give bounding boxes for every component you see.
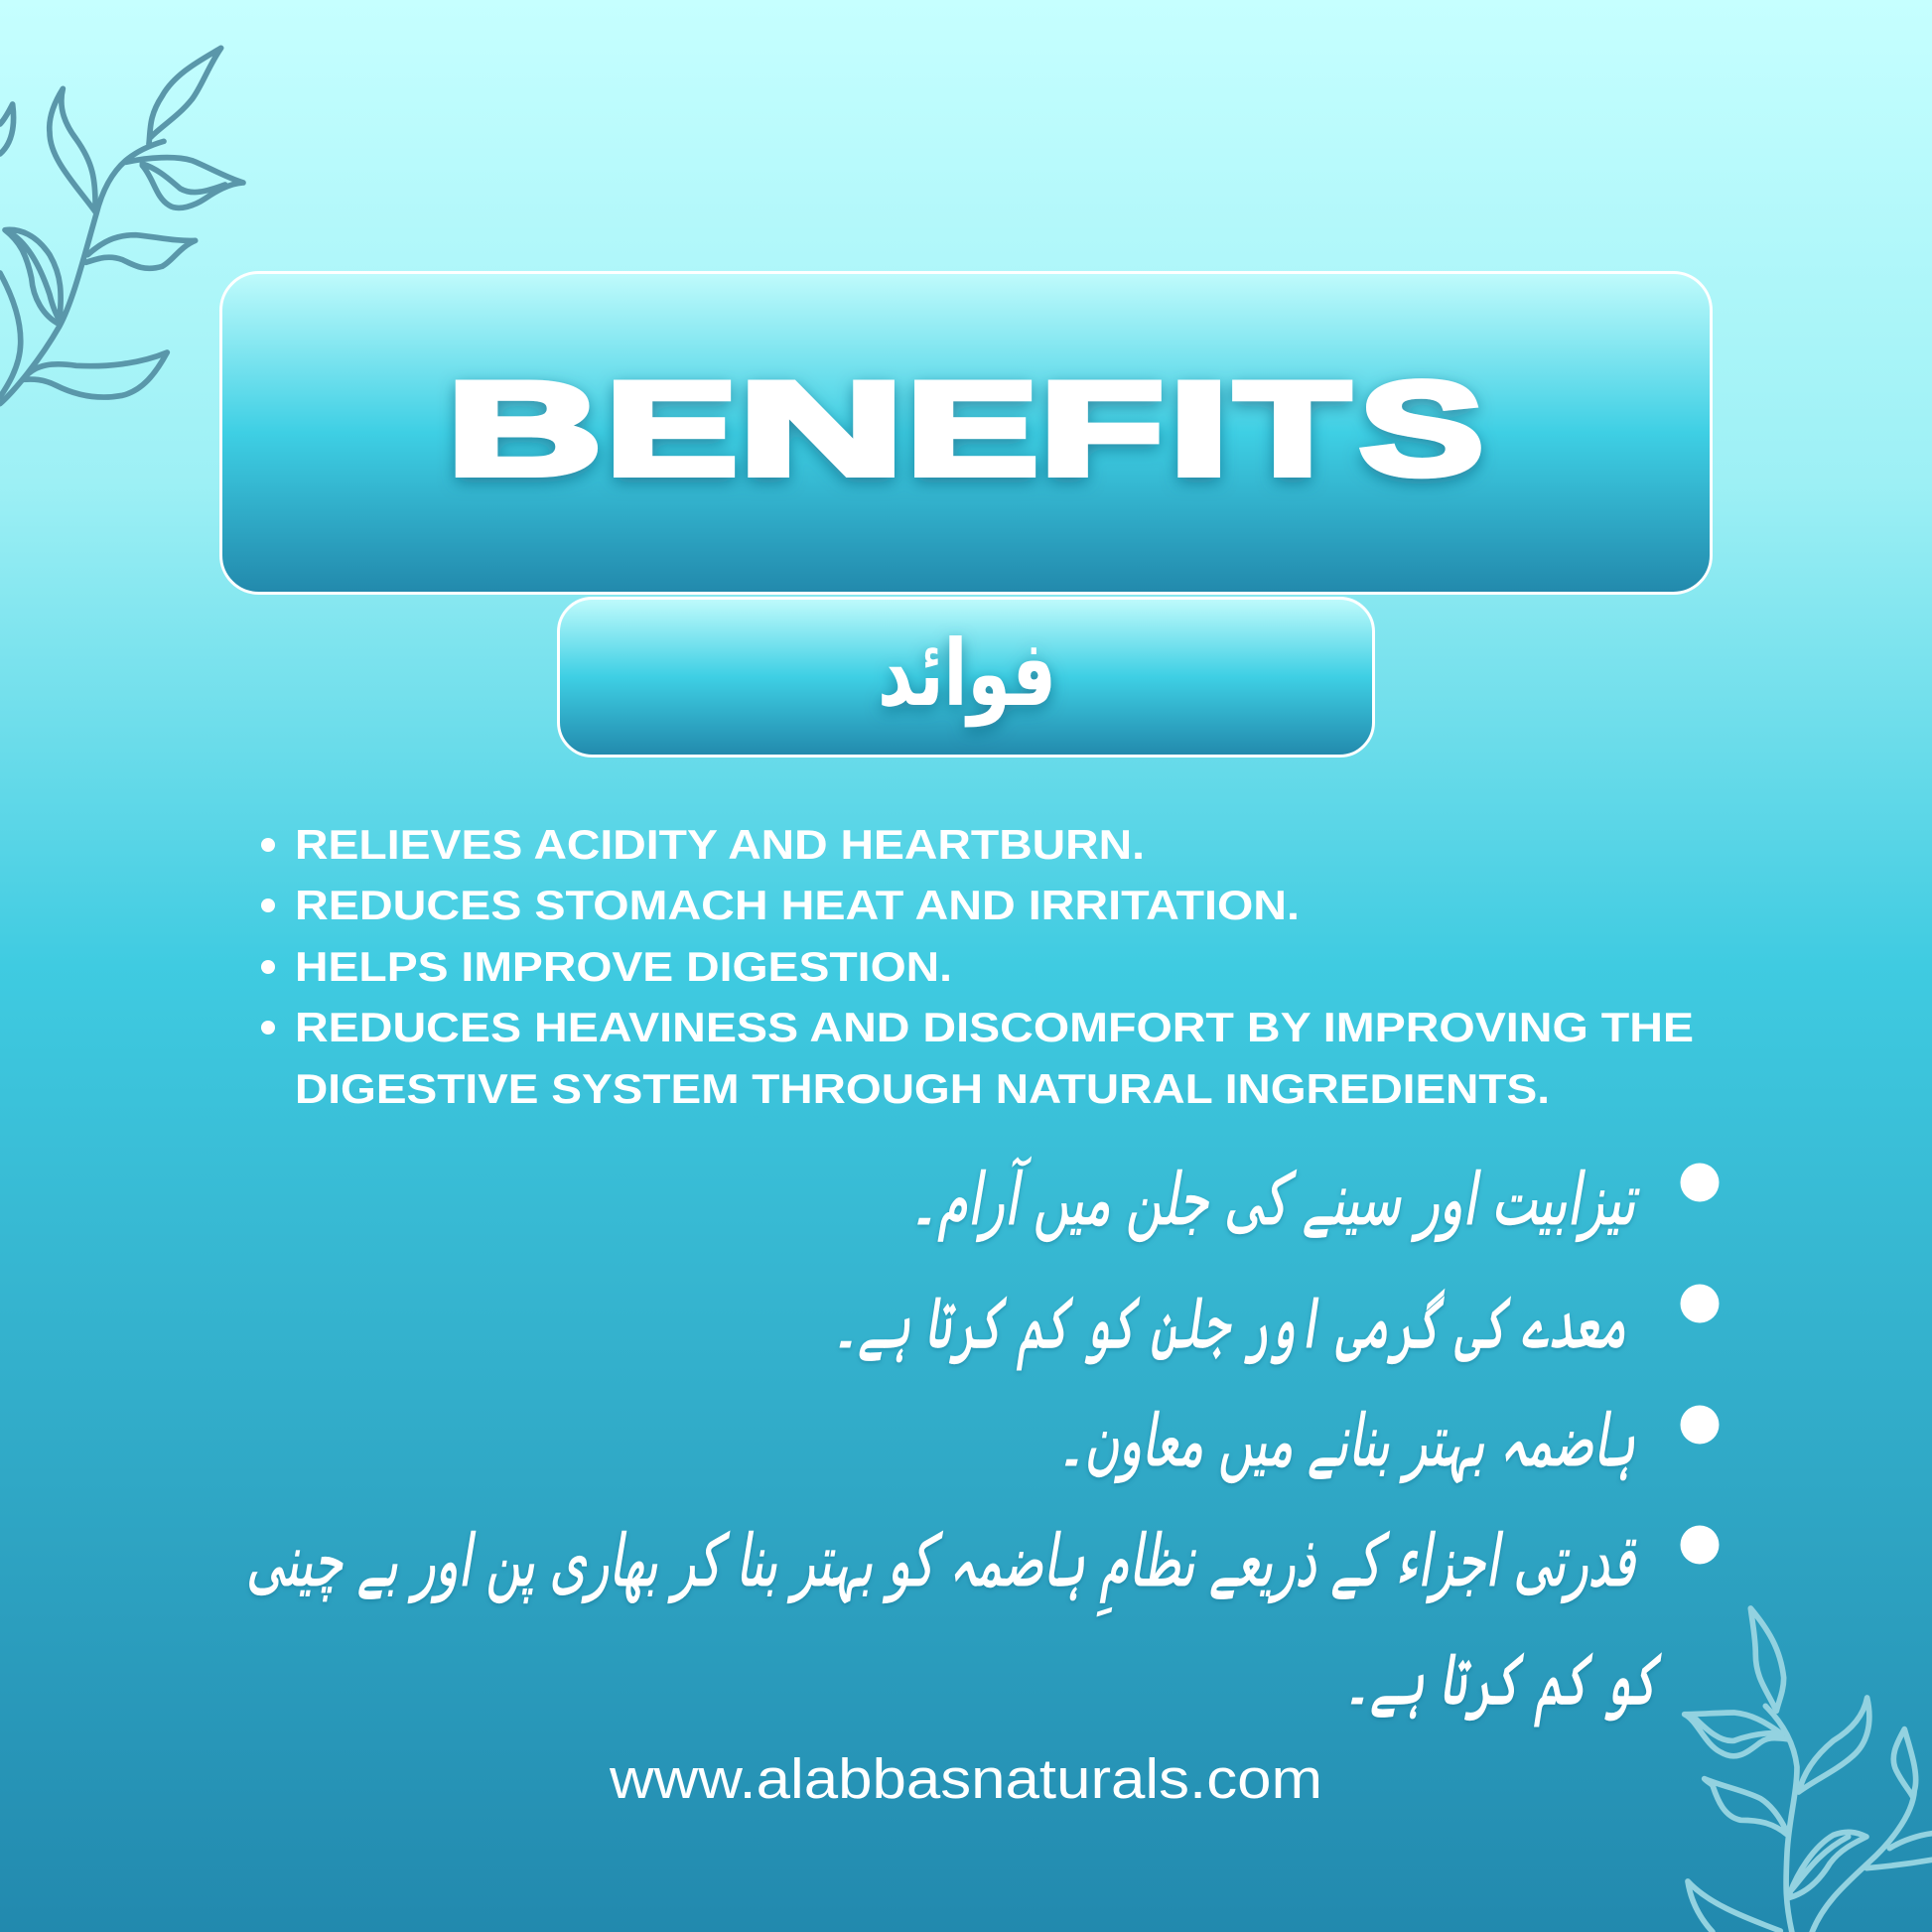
- English benefits list: REDUCES HEAVINESS AND DISCOMFORT BY IMPROVING THE: [295, 1004, 1694, 1050]
- panel: Urdu heading box: [558, 598, 1374, 757]
- English benefits list: DIGESTIVE SYSTEM THROUGH NATURAL INGREDIENTS.: [295, 1065, 1550, 1112]
- Urdu benefits list: کو کم کرتا ہے۔: [1343, 1637, 1662, 1726]
- heading: BENEFITS: T: [1235, 354, 1349, 502]
- English benefits list: RELIEVES ACIDITY AND HEARTBURN.: [295, 821, 1145, 868]
- heading: BENEFITS: I: [1170, 355, 1229, 502]
- English benefits list: [261, 821, 1694, 1112]
- website address: www.alabbasnaturals.com: [609, 1747, 1322, 1811]
- English benefits list: HELPS IMPROVE DIGESTION.: [295, 943, 952, 990]
- English benefits list: REDUCES STOMACH HEAT AND IRRITATION.: [295, 882, 1300, 928]
- heading: BENEFITS: [447, 354, 1483, 502]
- heading: BENEFITS: E: [906, 354, 1038, 502]
- Urdu benefits list: [246, 1157, 1720, 1726]
- icon: top-left leaf branch: [0, 48, 243, 404]
- heading: BENEFITS: S: [1360, 355, 1483, 502]
- heading: BENEFITS: N: [739, 354, 903, 502]
- heading: BENEFITS: F: [1040, 355, 1164, 502]
- heading: BENEFITS: E: [606, 354, 738, 502]
- icon: bottom-right leaf branch: [1685, 1608, 1932, 1932]
- heading: Urdu benefits: فوائد: [878, 621, 1056, 728]
- Urdu benefits list: ہاضمہ بہتر بنانے میں معاون۔: [1057, 1399, 1635, 1483]
- heading: BENEFITS: B: [447, 354, 602, 502]
- panel: benefits heading box: [220, 272, 1712, 594]
